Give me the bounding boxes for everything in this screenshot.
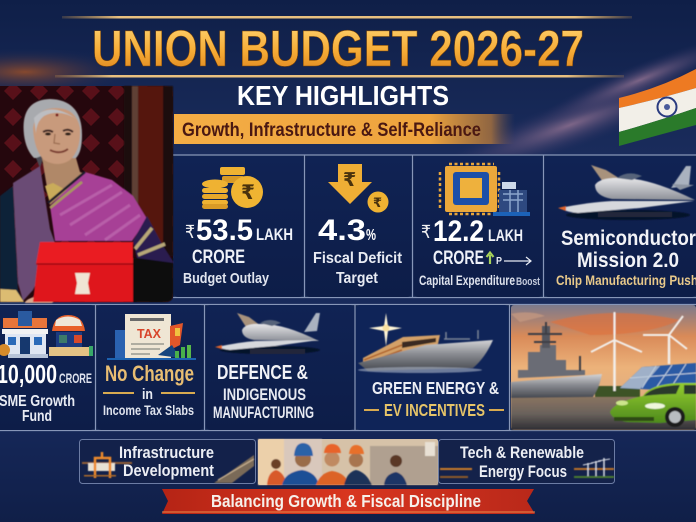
text: 4.3 percent <box>313 214 403 287</box>
text: defence: INDIGENOUS <box>223 386 306 404</box>
text: 12.2 lakh crore: P <box>496 256 502 267</box>
text: 53.5 lakh crore <box>183 214 293 287</box>
panel: photo of finance minister <box>0 86 174 303</box>
panel: green energy <box>356 305 508 430</box>
icon: down arrow with rupee <box>328 164 388 212</box>
text: green energy: GREEN ENERGY & <box>372 378 499 398</box>
text: 53.5 lakh crore: 53.5 <box>196 214 253 247</box>
panel: fiscal deficit <box>306 156 412 297</box>
text: no change <box>103 361 195 418</box>
icon: tax document: TAX <box>137 326 161 341</box>
icon: down arrow with rupee: ₹ <box>373 196 382 211</box>
panel: income tax <box>97 305 204 430</box>
green car <box>610 383 696 427</box>
text: 53.5 lakh crore: Budget Outlay <box>183 270 270 287</box>
banner <box>162 489 535 514</box>
panel: budget outlay <box>174 156 304 297</box>
solar panels <box>620 363 696 390</box>
panel: tech and renewable focus: Energy Focus <box>479 463 567 481</box>
text: 10,000 crore: Fund <box>22 408 52 425</box>
text: 4.3 percent: % <box>366 227 376 244</box>
text: 53.5 lakh crore: LAKH <box>256 225 293 244</box>
panel: msme fund <box>0 305 94 430</box>
text: no change: in <box>142 386 153 403</box>
panel: capital expenditure <box>414 156 542 297</box>
subtitle ribbon: Growth, Infrastructure & Self-Reliance <box>182 119 481 141</box>
icon: coins <box>202 167 263 209</box>
ground <box>511 397 696 430</box>
text: 4.3 percent: Fiscal Deficit <box>313 250 403 267</box>
panel: semiconductor mission <box>544 156 696 297</box>
panel: infrastructure development <box>80 440 256 484</box>
text: green energy <box>364 378 504 420</box>
text: 12.2 lakh crore: 12.2 <box>433 215 484 248</box>
subtitle ribbon <box>174 114 515 144</box>
heading: key highlights: KEY HIGHLIGHTS <box>237 80 449 111</box>
text: no change: Income Tax Slabs <box>103 402 194 418</box>
text: 12.2 lakh crore: Capital Expenditure <box>419 272 515 288</box>
title: UNION BUDGET 2026-27 <box>92 20 584 77</box>
text: semiconductor <box>556 227 696 288</box>
icon: shops <box>0 311 93 358</box>
icon: chip and buildings <box>440 164 530 216</box>
icon: jet <box>558 165 695 220</box>
text: 53.5 lakh crore: ₹ <box>185 222 195 243</box>
text: 53.5 lakh crore: CRORE <box>192 247 245 268</box>
text: 12.2 lakh crore: ₹ <box>421 222 431 243</box>
text: defence: DEFENCE & <box>217 362 308 384</box>
icon: cruise ship <box>358 313 493 373</box>
panel: tech and renewable focus <box>438 440 614 484</box>
text: green energy: EV INCENTIVES <box>384 400 485 420</box>
icon: wind turbines on horizon <box>440 458 614 478</box>
icon: road and bridge <box>82 452 254 483</box>
panel: card grid frame <box>0 154 696 431</box>
text: 4.3 percent: 4.3 <box>318 214 366 247</box>
text: 10,000 crore: CRORE <box>59 370 92 386</box>
panel: infrastructure development: Development <box>123 462 214 480</box>
panel: infrastructure development: Infrastructure <box>119 444 214 462</box>
warship <box>511 322 602 398</box>
text: 10,000 crore <box>0 359 92 425</box>
woman <box>0 99 174 303</box>
icon: indian flag <box>619 69 696 146</box>
text: defence <box>213 362 314 422</box>
text: semiconductor: Mission 2.0 <box>577 249 679 272</box>
text: 10,000 crore: SME Growth <box>0 393 75 410</box>
icon: coins: ₹ <box>241 180 255 204</box>
icon: fighter jet <box>215 313 320 354</box>
text: no change: No Change <box>105 361 194 386</box>
wind turbines <box>591 312 687 391</box>
text: 12.2 lakh crore <box>419 215 540 288</box>
icon: down arrow with rupee: ₹ <box>343 169 356 191</box>
banner: Balancing Growth & Fiscal Discipline <box>211 491 481 511</box>
panel: tech and renewable focus: Tech & Renewable <box>460 444 584 462</box>
panel: defence manufacturing <box>206 305 354 430</box>
panel: navy, wind, solar and EV scene <box>511 305 696 430</box>
text: 12.2 lakh crore: LAKH <box>488 226 523 245</box>
panel: workers photo <box>258 439 438 485</box>
red budget bag <box>33 242 133 302</box>
text: defence: MANUFACTURING <box>213 404 314 422</box>
text: 4.3 percent: Target <box>336 270 379 287</box>
text: 12.2 lakh crore: Boost <box>516 276 540 288</box>
text: 12.2 lakh crore: CRORE <box>433 248 484 269</box>
